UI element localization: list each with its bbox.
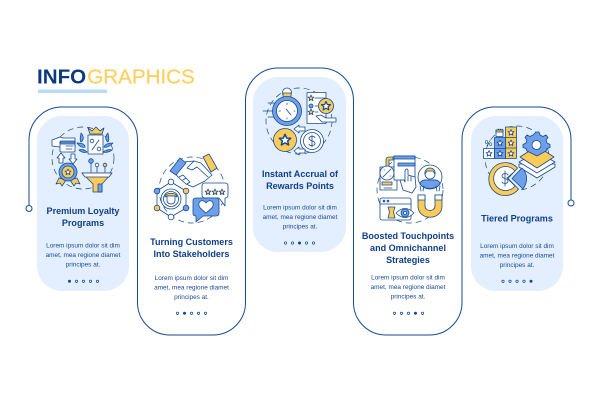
panel text: turning customers: principes at. xyxy=(174,294,209,301)
icon: loyalty programs xyxy=(52,127,114,192)
panel text: turning customers: Lorem ipsum dolor sit dim xyxy=(155,275,228,282)
panel text: turning customers: Turning Customers xyxy=(150,237,233,247)
panel text: premium loyalty: Lorem ipsum dolor sit dim xyxy=(46,242,120,250)
panel text: instant accrual: principes at. xyxy=(283,224,318,230)
icon: tiered bars and pie: % xyxy=(485,139,492,148)
panel text: tiered programs: Lorem ipsum dolor sit dim xyxy=(480,243,554,250)
panel text: boosted touchpoints: Strategies xyxy=(386,255,430,265)
panel text: instant accrual xyxy=(262,169,339,230)
title underline xyxy=(38,90,107,93)
panel text: premium loyalty: principes at. xyxy=(66,262,101,268)
panel text: turning customers: amet, mea regione diamet xyxy=(154,284,229,292)
panel text: tiered programs xyxy=(480,214,555,269)
pagination dots 4 xyxy=(393,312,424,315)
panel text: premium loyalty: Programs xyxy=(62,218,104,228)
panel text: premium loyalty: Premium Loyalty xyxy=(47,206,119,216)
serpentine outline connector xyxy=(29,68,571,335)
start node xyxy=(26,206,32,212)
panel text: tiered programs: Tiered Programs xyxy=(481,214,553,224)
icon: tiered bars and pie xyxy=(484,126,555,196)
panel text: tiered programs: principes at. xyxy=(500,262,535,269)
panel text: turning customers: Into Stakeholders xyxy=(154,249,229,259)
panel text: premium loyalty xyxy=(46,206,121,268)
panel text: boosted touchpoints: amet, mea regione diamet xyxy=(371,284,446,291)
panel text: boosted touchpoints: Boosted Touchpoints xyxy=(362,231,454,241)
panel background: tiered programs xyxy=(471,116,563,291)
panel text: boosted touchpoints: Lorem ipsum dolor sit dim xyxy=(371,274,445,282)
icon: touchpoints and magnet xyxy=(377,156,443,223)
pagination dots 3 xyxy=(284,242,315,244)
pagination dots 2 xyxy=(176,312,207,315)
panel text: premium loyalty: amet, mea regione diamet xyxy=(46,252,121,259)
icon: stopwatch and rewards xyxy=(263,88,336,155)
panel text: instant accrual: Lorem ipsum dolor sit dim xyxy=(263,204,337,212)
panel text: instant accrual: amet, mea regione diamet xyxy=(263,214,338,221)
panel text: tiered programs: amet, mea regione diamet xyxy=(480,252,555,260)
panel background: premium loyalty xyxy=(37,116,129,291)
panel text: instant accrual: Instant Accrual of xyxy=(262,169,339,179)
icon: handshake and network xyxy=(154,154,228,223)
panel background: instant accrual xyxy=(253,77,346,252)
panel text: turning customers xyxy=(150,237,233,301)
end node xyxy=(568,200,574,206)
panel text: boosted touchpoints: and Omnichannel xyxy=(370,243,446,253)
panel text: instant accrual: Rewards Points xyxy=(266,181,334,191)
panel text: boosted touchpoints xyxy=(362,231,454,300)
panel text: boosted touchpoints: principes at. xyxy=(391,294,426,300)
pagination dots 5 xyxy=(502,280,532,283)
title: INFOGRAPHICS xyxy=(37,66,195,88)
pagination dots 1 xyxy=(68,280,99,283)
